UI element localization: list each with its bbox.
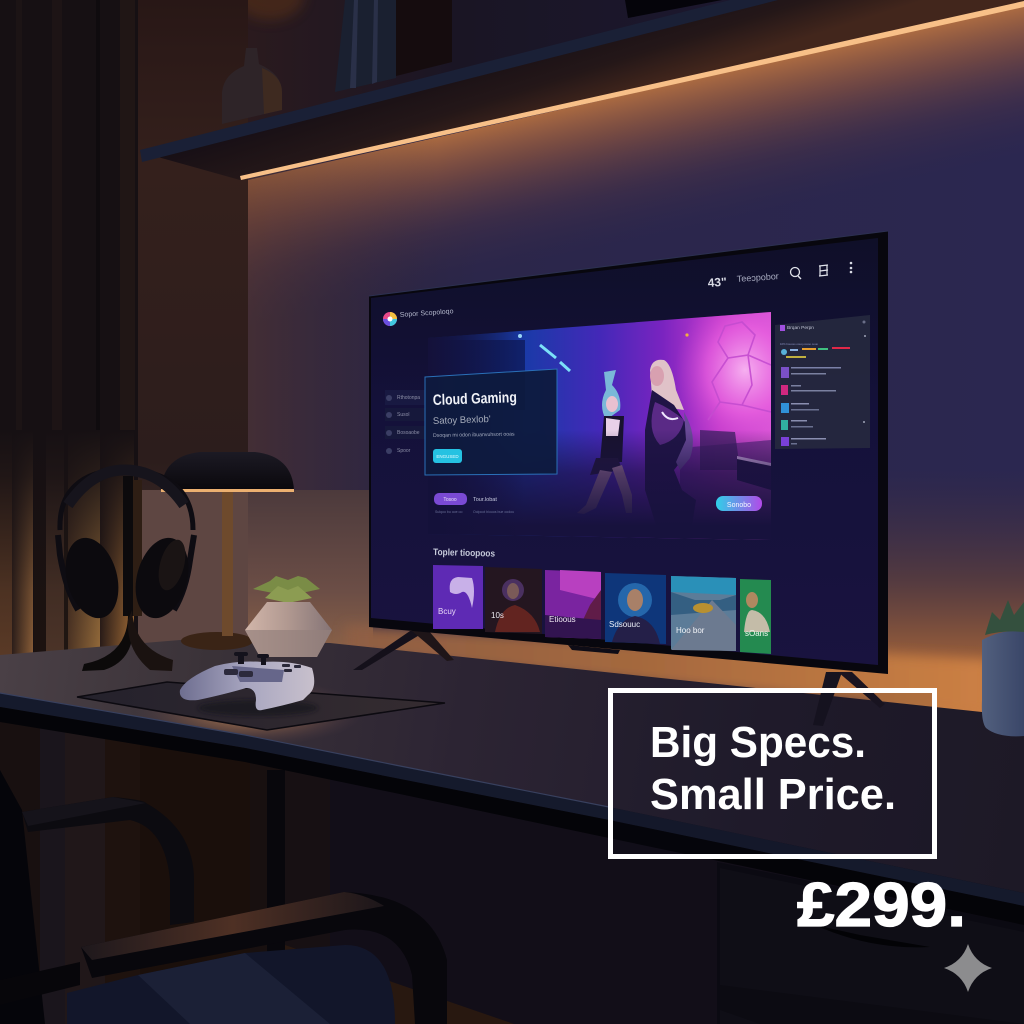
app logo and name: Sopor Scopoloqo <box>400 308 454 319</box>
Cloud Gaming feature card: Dsoqan mi odon ibuanvuhsort ooas <box>433 432 515 439</box>
desk lamp <box>161 452 294 650</box>
game thumbnail 1: Bcuy <box>438 607 456 616</box>
app logo and name <box>383 308 454 326</box>
left character <box>577 370 632 514</box>
activity side panel <box>775 315 870 449</box>
top bar status and icons: Teeɔpobor <box>736 271 779 284</box>
upper wall behind shelf objects <box>236 0 775 125</box>
activity side panel: Brqan Perpn <box>787 325 814 331</box>
right character <box>645 360 696 516</box>
headphone stand and headphones <box>57 469 197 671</box>
secondary controls <box>434 493 514 514</box>
secondary controls: Tour.lobat <box>473 497 497 503</box>
shelf dark box <box>625 0 722 18</box>
game thumbnail 6: sOans <box>745 629 768 638</box>
headline text: Big Specs. <box>650 718 866 767</box>
LED strip <box>240 1 1024 180</box>
game thumbnail 2 <box>485 567 542 634</box>
TV screen <box>371 238 878 665</box>
headline text: Small Price. <box>650 770 896 819</box>
game controller <box>180 652 318 716</box>
section heading: Topler tioopoos <box>433 547 495 560</box>
game thumbnail 3: Etioous <box>549 615 576 624</box>
Cloud Gaming feature card: Cloud Gaming <box>433 389 517 409</box>
price: £299. <box>797 871 966 940</box>
game thumbnail 5 <box>671 576 736 651</box>
game thumbnail 4: Sdsouuc <box>609 620 640 629</box>
side navigation <box>385 390 425 454</box>
TV bezel <box>369 231 888 674</box>
chair <box>0 770 447 1024</box>
curtains <box>0 0 138 730</box>
activity side panel: 10% bouoso oouq oosoo oouo <box>780 342 818 346</box>
hero artwork <box>430 312 771 540</box>
side wall <box>135 0 248 660</box>
secondary controls: Oolpoot biouos bue oodou <box>473 510 514 514</box>
succulent in faceted pot <box>245 576 332 657</box>
side navigation: Susol <box>397 412 410 418</box>
hero call to action: Sonobo <box>727 502 751 509</box>
top bar status and icons: 43" <box>707 275 727 290</box>
side navigation: Spoor <box>397 448 411 454</box>
top bar status and icons <box>707 262 852 290</box>
headline box <box>610 690 934 856</box>
game thumbnail 2: 10s <box>491 611 504 620</box>
Cloud Gaming feature card <box>425 369 557 475</box>
room back wall <box>248 0 1024 760</box>
desk <box>0 640 1024 925</box>
hero call to action <box>716 496 762 511</box>
side navigation: Rthotonpa <box>397 395 420 401</box>
side navigation: Bosoaobe <box>397 430 420 436</box>
game thumbnail 5: Hoo bor <box>676 626 705 635</box>
drawer unit <box>717 862 1024 1024</box>
icon: four-point sparkle <box>944 944 992 992</box>
game thumbnail 3 <box>545 570 601 639</box>
game thumbnail 1 <box>433 565 483 629</box>
Cloud Gaming feature card: Satoy Bexlob' <box>433 414 491 427</box>
TV legs <box>353 630 885 726</box>
Cloud Gaming feature card: ENGUSED <box>436 454 459 459</box>
mouse pad <box>77 682 445 730</box>
headline text <box>650 718 896 819</box>
secondary controls: Sulqoo bu ooe oo <box>435 510 462 514</box>
secondary controls: Tosoo <box>443 497 457 503</box>
game thumbnail 6 <box>740 579 771 654</box>
shelf with LED strip <box>140 0 1024 180</box>
right desk plant <box>982 600 1024 736</box>
shelf vase <box>222 48 282 124</box>
under desk area <box>0 700 1024 1024</box>
game thumbnail 4 <box>605 573 666 644</box>
shelf books <box>335 0 452 92</box>
